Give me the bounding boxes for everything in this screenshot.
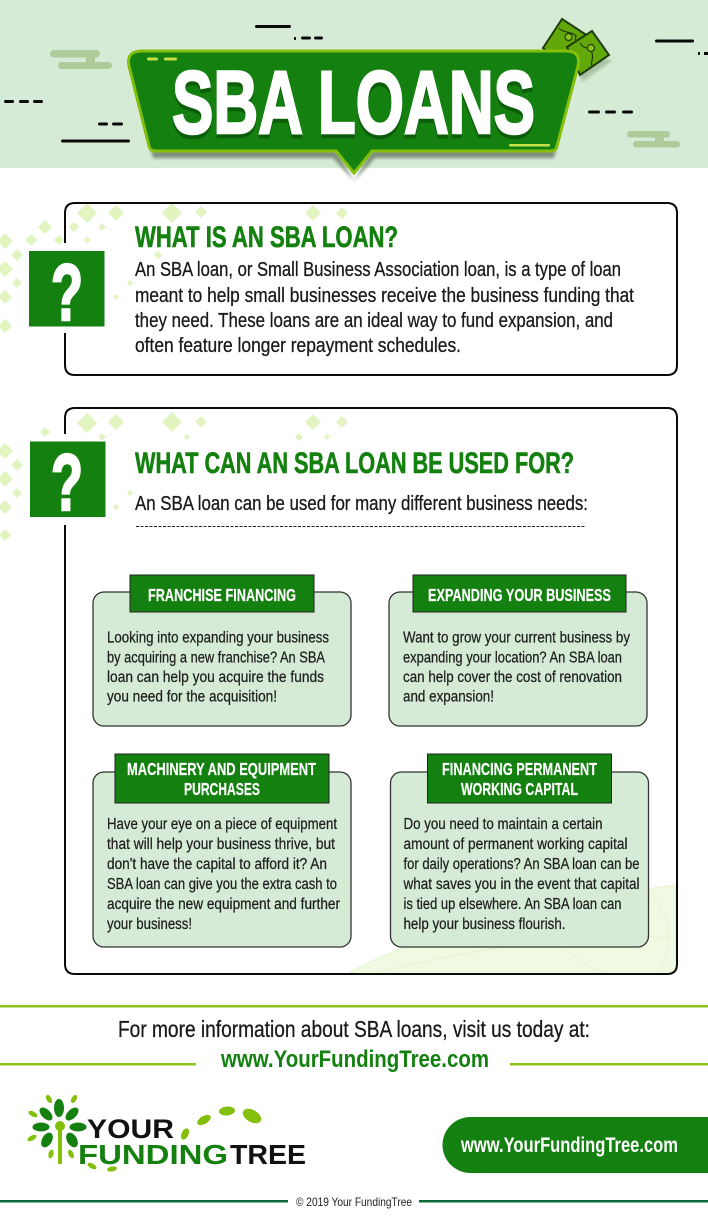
card: franchise financing: FRANCHISE FINANCING xyxy=(148,585,296,605)
card: expanding your business: and expansion! xyxy=(403,688,494,706)
cloud: right xyxy=(627,131,680,148)
logo: Your Funding Tree: TREE xyxy=(230,1139,306,1170)
card: machinery and equipment purchases: that will help your business thrive, but xyxy=(107,836,336,853)
card: financing permanent working capital: help your business flourish. xyxy=(404,916,566,933)
logo: Your Funding Tree: FUNDING xyxy=(78,1139,228,1170)
title banner xyxy=(129,51,579,173)
card: machinery and equipment purchases: PURCHASES xyxy=(184,779,260,799)
card: franchise financing xyxy=(93,575,351,726)
card: franchise financing: you need for the acquisition! xyxy=(107,688,277,706)
card: financing permanent working capital: WORKING CAPITAL xyxy=(461,779,578,799)
card: financing permanent working capital: Do you need to maintain a certain xyxy=(404,816,602,833)
decorative swoosh xyxy=(350,880,676,972)
logo: Your Funding Tree: YOUR xyxy=(87,1114,174,1144)
card: financing permanent working capital: amount of permanent working capital xyxy=(404,836,628,853)
card: expanding your business: Want to grow your current business by xyxy=(403,630,630,646)
panel: what is an SBA loan xyxy=(29,203,677,375)
card: financing permanent working capital: what saves you in the event that capital xyxy=(403,876,640,893)
decorative diamonds xyxy=(0,203,348,541)
card: machinery and equipment purchases: SBA loan can give you the extra cash to xyxy=(107,876,337,893)
body text: meant to help small businesses receive the business funding that xyxy=(135,285,634,307)
footer call to action: For more information about SBA loans, visit us today at: xyxy=(118,1016,590,1042)
icon: question mark xyxy=(29,248,104,337)
header background xyxy=(0,0,708,168)
icon: money bills xyxy=(543,19,613,82)
copyright line: © 2019 Your FundingTree xyxy=(296,1195,412,1209)
card: machinery and equipment purchases: don't have the capital to afford it? An xyxy=(107,856,327,873)
card: machinery and equipment purchases: MACHINERY AND EQUIPMENT xyxy=(127,759,316,779)
body text: they need. These loans are an ideal way to fund expansion, and xyxy=(135,310,613,332)
card: machinery and equipment purchases: acquire the new equipment and further xyxy=(107,896,340,913)
card: franchise financing: loan can help you acquire the funds xyxy=(107,669,324,686)
cloud: left xyxy=(50,50,112,69)
card: expanding your business: can help cover the cost of renovation xyxy=(403,669,622,686)
card: financing permanent working capital: is tied up elsewhere. An SBA loan can xyxy=(404,896,622,913)
speed dashes xyxy=(4,25,708,142)
card: machinery and equipment purchases: Have your eye on a piece of equipment xyxy=(107,816,338,833)
card: machinery and equipment purchases: your business! xyxy=(107,916,192,933)
card: financing permanent working capital xyxy=(390,754,648,947)
footer call to action: www.YourFundingTree.com xyxy=(220,1046,489,1073)
title text shadow: SBA LOANS xyxy=(172,56,535,156)
card: franchise financing: by acquiring a new franchise? An SBA xyxy=(107,650,326,666)
card: franchise financing: Looking into expanding your business xyxy=(107,630,329,646)
footer call to action xyxy=(0,1005,708,1073)
heading: WHAT IS AN SBA LOAN? xyxy=(135,221,398,254)
card: expanding your business: expanding your location? An SBA loan xyxy=(403,650,622,666)
logo: Your Funding Tree xyxy=(26,1094,306,1172)
website pill button xyxy=(442,1117,708,1173)
banner shadow xyxy=(151,150,556,181)
icon: question mark: ? xyxy=(51,438,83,527)
card: expanding your business xyxy=(389,575,647,726)
icon: tree xyxy=(26,1094,264,1172)
icon: question mark: ? xyxy=(51,248,83,337)
card: expanding your business: EXPANDING YOUR BUSINESS xyxy=(428,585,611,605)
card: machinery and equipment purchases xyxy=(93,754,351,947)
body text: An SBA loan, or Small Business Association loan, is a type of loan xyxy=(135,259,621,281)
card: financing permanent working capital: FINANCING PERMANENT xyxy=(442,759,597,779)
icon: question mark xyxy=(30,438,106,527)
intro text: An SBA loan can be used for many different business needs: xyxy=(135,493,588,515)
body text xyxy=(135,259,634,357)
card: financing permanent working capital: for daily operations? An SBA loan can be xyxy=(404,856,640,873)
title: SBA LOANS xyxy=(172,52,535,152)
panel: what can an SBA loan be used for xyxy=(30,408,677,974)
body text: often feature longer repayment schedules. xyxy=(135,335,461,357)
